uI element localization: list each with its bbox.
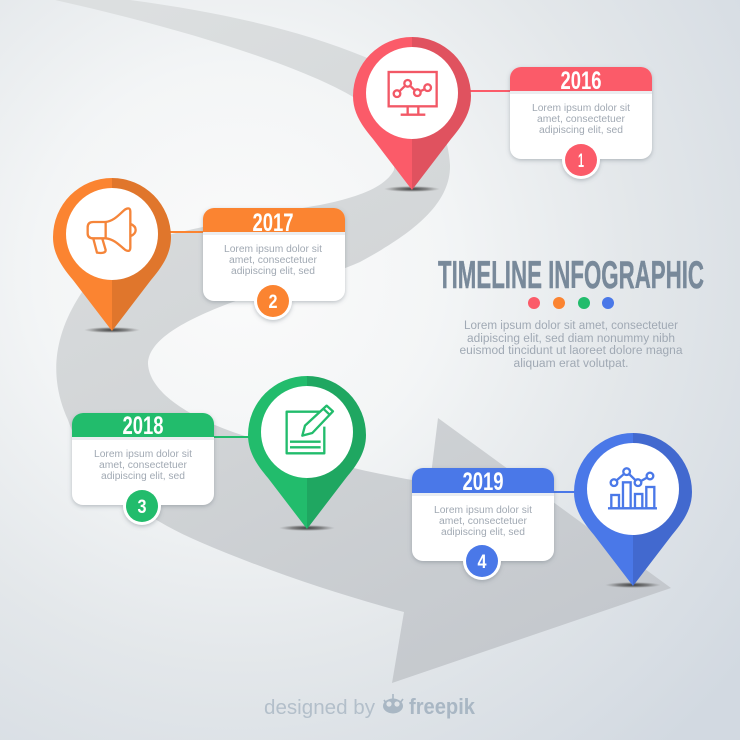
icon: notepad and pencil [287,406,333,453]
connector line [552,491,577,493]
connector line [170,231,205,233]
panel: 2018 milestone [72,376,366,531]
panel: 2017 milestone [53,178,345,333]
icon: freepik mascot [383,694,403,714]
pin shadow [279,525,335,531]
card 2019: 4 [478,552,487,573]
pin shadow [605,582,661,588]
card 2019: 2019 [462,468,504,496]
card 2016: adipiscing elit, sed [539,125,623,136]
intro paragraph: aliquam erat volutpat. [514,358,628,370]
connector line [470,90,512,92]
card 2019: Lorem ipsum dolor sit [434,505,532,516]
intro paragraph: adipiscing elit, sed diam nonummy nibh [467,333,675,345]
card 2017: 2017 [252,209,294,237]
footer credit [264,694,476,719]
designed by text: designed by [264,697,375,719]
card 2018: Lorem ipsum dolor sit [94,449,192,460]
location pin red [353,37,471,190]
card 2019: amet, consectetuer [439,516,528,527]
freepik wordmark: freepik [409,694,476,719]
card 2017: amet, consectetuer [229,255,318,266]
panel: 2016 milestone [353,37,652,192]
colour dots [528,297,614,309]
card 2016: 2016 [560,67,602,95]
card 2017: 2 [268,292,278,313]
connector line [212,436,250,438]
card 2018: 3 [138,497,146,518]
icon: bar and line chart [608,468,657,508]
intro paragraph: euismod tincidunt ut laoreet dolore magna [460,345,683,357]
location pin green [248,376,366,529]
card 2017: Lorem ipsum dolor sit [224,244,322,255]
card 2019: adipiscing elit, sed [441,527,525,538]
location pin orange [53,178,171,331]
card 2018: 2018 [122,412,164,440]
card 2017 [203,208,345,320]
card 2018 [72,412,214,525]
card 2016: 1 [578,151,584,172]
location pin blue [574,433,692,586]
card 2017: adipiscing elit, sed [231,266,315,277]
card 2016: Lorem ipsum dolor sit [532,103,630,114]
card 2016 [510,67,652,179]
pin shadow [384,186,440,192]
icon: megaphone [88,208,136,253]
panel: 2019 milestone [412,433,692,588]
card 2018: adipiscing elit, sed [101,471,185,482]
card 2019 [412,468,554,580]
intro paragraph: Lorem ipsum dolor sit amet, consectetuer [464,320,678,332]
card 2016: amet, consectetuer [537,114,626,125]
icon: monitor chart [389,72,437,115]
winding road arrow [55,0,671,683]
intro paragraph [460,320,683,370]
card 2018: amet, consectetuer [99,460,188,471]
pin shadow [84,327,140,333]
